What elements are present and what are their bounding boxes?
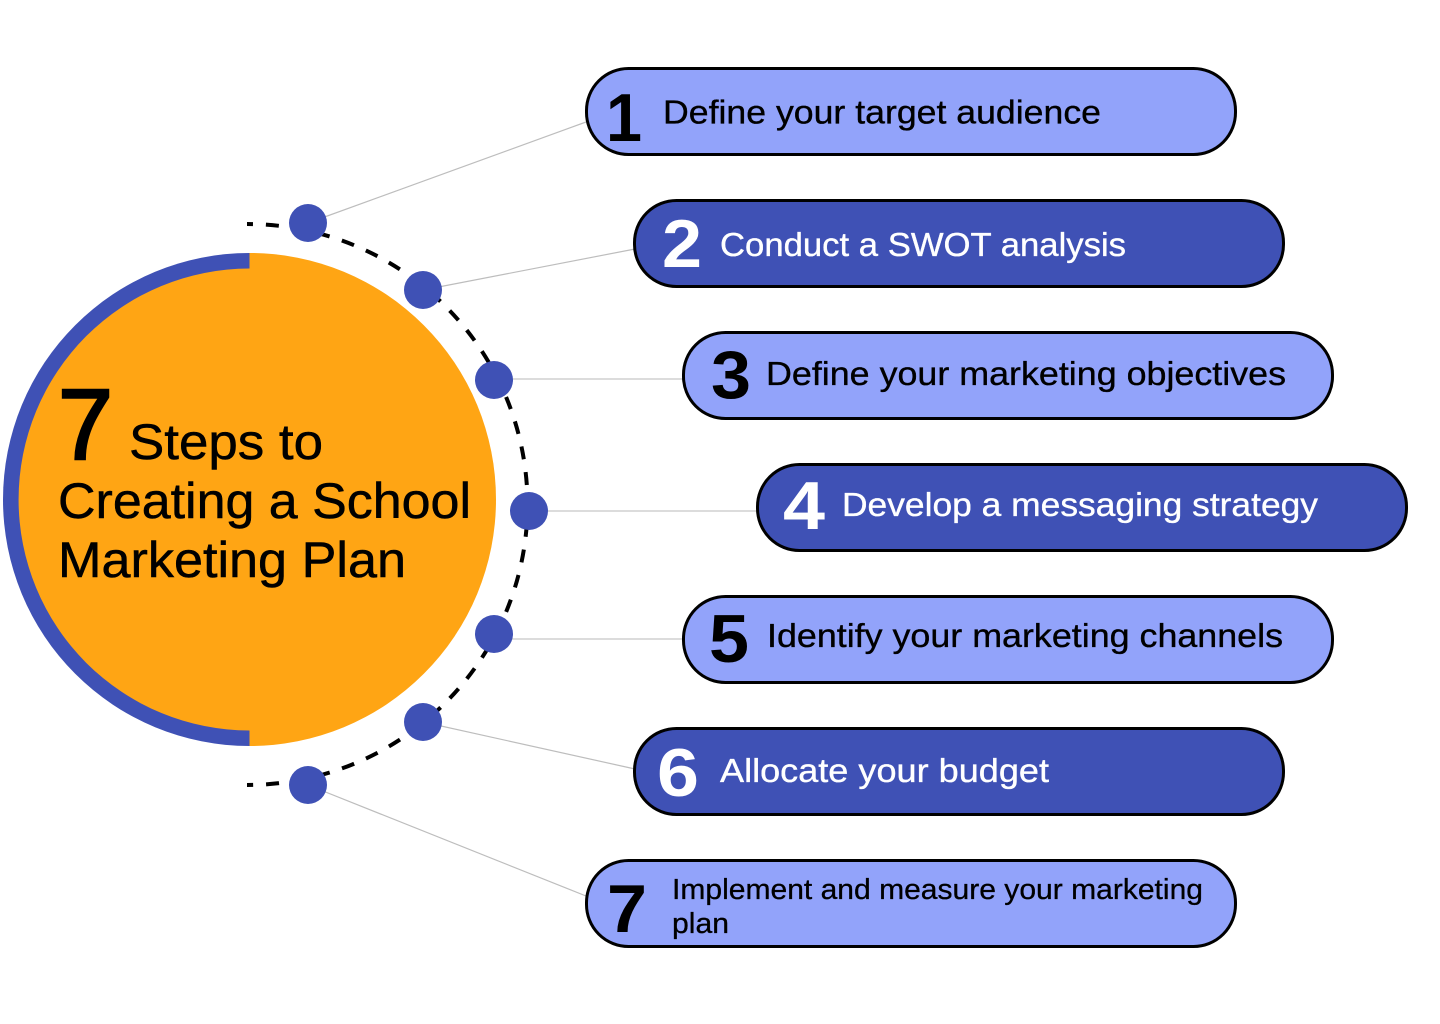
step 1 [586,68,1236,156]
step 2: 2 [662,206,702,282]
step 7 [586,860,1236,947]
dashed arc [247,224,528,785]
step 4: 4 [783,468,825,544]
step 5 [684,596,1332,682]
step 2 [634,200,1284,286]
connector lines [308,122,758,896]
step 5: 5 [709,601,749,677]
title: Creating a School [58,473,471,529]
central circle [3,253,496,746]
step 3: Define your marketing objectives [766,355,1286,392]
step 7: 7 [607,871,647,947]
step 5: Identify your marketing channels [767,617,1283,654]
timeline dots [289,204,548,804]
title: Steps to [129,414,323,470]
step 4 [758,464,1406,550]
title: 7 [58,369,113,481]
step 6: 6 [657,735,699,811]
step 7: plan [672,908,729,940]
title [58,369,471,588]
step 4: Develop a messaging strategy [842,486,1319,523]
step 3 [684,332,1332,418]
step 3: 3 [711,337,751,413]
step 1: Define your target audience [663,94,1101,130]
step 6 [634,728,1284,814]
step 1: 1 [606,80,642,156]
title: Marketing Plan [58,532,406,588]
step 6: Allocate your budget [720,752,1049,789]
step 2: Conduct a SWOT analysis [720,226,1126,263]
step 7: Implement and measure your marketing [672,874,1203,906]
